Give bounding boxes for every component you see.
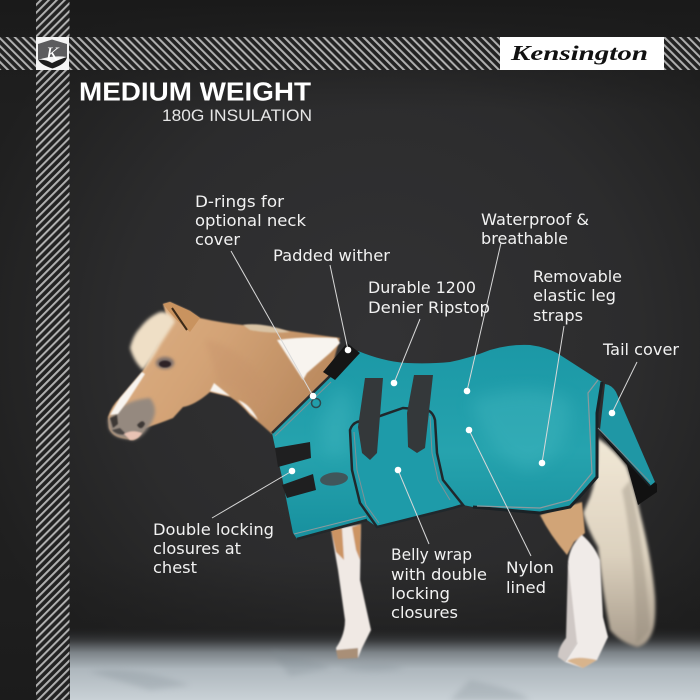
ear (163, 302, 200, 332)
D-ring (312, 398, 320, 408)
label: nylon lined: lined (506, 578, 546, 597)
label: leg straps: elastic leg (533, 286, 616, 305)
callout dots (289, 347, 615, 474)
tail (583, 438, 655, 647)
logo: K shield (36, 37, 69, 70)
logo: Kensington wordmark (500, 37, 664, 70)
label: belly wrap: Belly wrap (391, 545, 472, 564)
forelock (130, 312, 175, 370)
label: leg straps: Removable (533, 267, 622, 286)
belly wrap (350, 408, 463, 527)
title: MEDIUM WEIGHT (79, 76, 311, 106)
logo: K shield: K (45, 44, 60, 65)
hind leg (540, 502, 608, 668)
label: leg straps (533, 267, 622, 325)
blanket body (272, 345, 602, 539)
label: nylon lined (506, 558, 554, 597)
neck shading (205, 340, 270, 415)
horse illustration (108, 302, 657, 668)
striped band: horizontal (0, 37, 700, 70)
label: chest closures: Double locking (153, 520, 274, 539)
muzzle shading (108, 398, 155, 440)
label: waterproof: Waterproof & (481, 210, 589, 229)
label: leg straps: straps (533, 306, 583, 325)
logo: Kensington wordmark: Kensington (510, 41, 648, 65)
label: ripstop (368, 278, 490, 317)
tail cover (600, 384, 655, 486)
label: chest closures: closures at (153, 539, 241, 558)
eye (156, 357, 174, 369)
label: waterproof: breathable (481, 229, 568, 248)
title: 180G INSULATION (162, 107, 312, 125)
label: belly wrap (391, 545, 487, 622)
label: ripstop: Durable 1200 (368, 278, 476, 297)
nostril and mouth (110, 415, 145, 440)
label: D-rings (195, 192, 307, 249)
label: belly wrap: closures (391, 603, 458, 622)
fabric highlights (320, 385, 570, 470)
label: belly wrap: with double (391, 565, 487, 584)
chest straps (275, 442, 316, 498)
straps (358, 375, 433, 460)
blanket piping (272, 376, 650, 539)
label: waterproof (481, 210, 589, 248)
sand floor (70, 626, 700, 700)
upper mane (243, 324, 290, 333)
white markings (110, 337, 340, 420)
title (79, 76, 312, 125)
label: nylon lined: Nylon (506, 558, 554, 577)
head and neck (108, 302, 340, 440)
padded wither (323, 343, 360, 380)
label: padded wither: Padded wither (273, 246, 390, 265)
label: D-rings: D-rings for (195, 192, 284, 211)
chest logo patch (319, 471, 349, 487)
front leg (331, 524, 371, 659)
far hind leg (558, 563, 583, 662)
label: belly wrap: locking (391, 584, 450, 603)
label: tail cover: Tail cover (602, 340, 679, 359)
label: chest closures (153, 520, 274, 577)
striped band: vertical (36, 0, 70, 700)
tail cover lining (600, 434, 657, 505)
label: chest closures: chest (153, 558, 197, 577)
callout lines (212, 243, 637, 556)
label: ripstop: Denier Ripstop (368, 298, 490, 317)
label: D-rings: optional neck (195, 211, 307, 230)
label: D-rings: cover (195, 230, 240, 249)
